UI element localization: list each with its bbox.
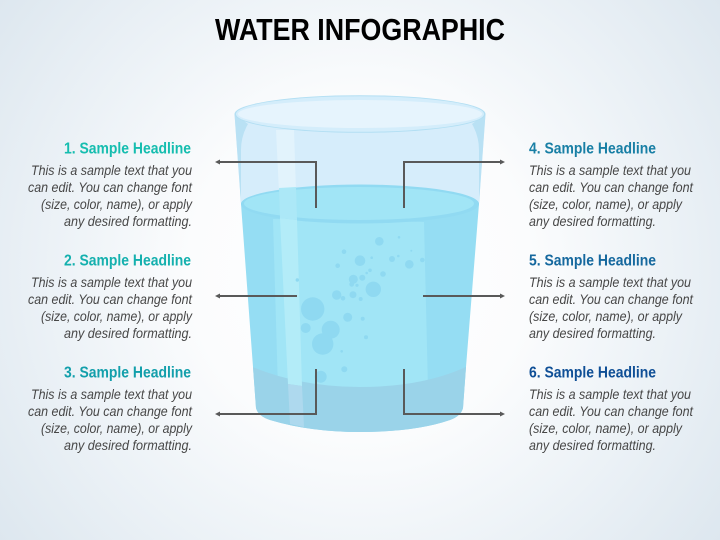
connector 1 (215, 160, 316, 208)
water surface inner (244, 187, 474, 220)
text block 1: can edit. You can change font (28, 179, 193, 195)
bubbles (296, 236, 425, 383)
text block 6: any desired formatting. (529, 437, 656, 453)
text block 1: any desired formatting. (64, 213, 192, 229)
highlight stripe in base (288, 384, 304, 427)
text block 6: 6. Sample Headline (529, 364, 656, 382)
text block 3: (size, color, name), or apply (41, 420, 193, 436)
text block 5: (size, color, name), or apply (529, 308, 683, 324)
text block 4 (529, 140, 694, 229)
connector 2 (215, 294, 297, 298)
text block 3: any desired formatting. (64, 437, 192, 453)
glass of water (230, 95, 490, 440)
glass rim (234, 95, 486, 133)
lighter inner water (273, 219, 428, 390)
connector 6 (404, 369, 505, 416)
title: WATER INFOGRAPHIC (215, 12, 505, 47)
text block 4: This is a sample text that you (529, 162, 691, 178)
highlight stripe on surface (279, 187, 297, 220)
bottom thick glass (253, 367, 466, 432)
text block 2: any desired formatting. (64, 325, 192, 341)
text block 4: can edit. You can change font (529, 179, 694, 195)
glass side shading (234, 114, 486, 204)
text block 5 (529, 252, 694, 341)
text block 5: This is a sample text that you (529, 274, 691, 290)
text block 5: any desired formatting. (529, 325, 656, 341)
rim band (236, 96, 484, 132)
connector 3 (215, 369, 316, 416)
text block 2 (28, 252, 193, 341)
connector 5 (423, 294, 505, 298)
text block 2: 2. Sample Headline (64, 252, 191, 270)
text block 6: (size, color, name), or apply (529, 420, 683, 436)
text block 3 (28, 364, 193, 453)
text block 4: (size, color, name), or apply (529, 196, 683, 212)
glass highlight stripe upper (276, 130, 296, 192)
text block 6: This is a sample text that you (529, 386, 691, 402)
text block 4: 4. Sample Headline (529, 140, 656, 158)
text block 1: 1. Sample Headline (64, 140, 191, 158)
highlight stripe in water (280, 218, 302, 386)
text block 1: This is a sample text that you (31, 162, 192, 178)
rim opening (238, 100, 482, 128)
text block 2: This is a sample text that you (31, 274, 192, 290)
text block 6 (529, 364, 694, 453)
text block 4: any desired formatting. (529, 213, 656, 229)
text block 3: 3. Sample Headline (64, 364, 191, 382)
text block 1 (28, 140, 193, 229)
connector 4 (404, 160, 505, 208)
text block 1: (size, color, name), or apply (41, 196, 193, 212)
text block 3: can edit. You can change font (28, 403, 193, 419)
text block 6: can edit. You can change font (529, 403, 694, 419)
text block 5: can edit. You can change font (529, 291, 694, 307)
text block 5: 5. Sample Headline (529, 252, 656, 270)
water body (241, 195, 479, 432)
text block 2: (size, color, name), or apply (41, 308, 193, 324)
glass upper body (234, 114, 486, 204)
water surface (241, 184, 479, 224)
text block 2: can edit. You can change font (28, 291, 193, 307)
text block 3: This is a sample text that you (31, 386, 192, 402)
